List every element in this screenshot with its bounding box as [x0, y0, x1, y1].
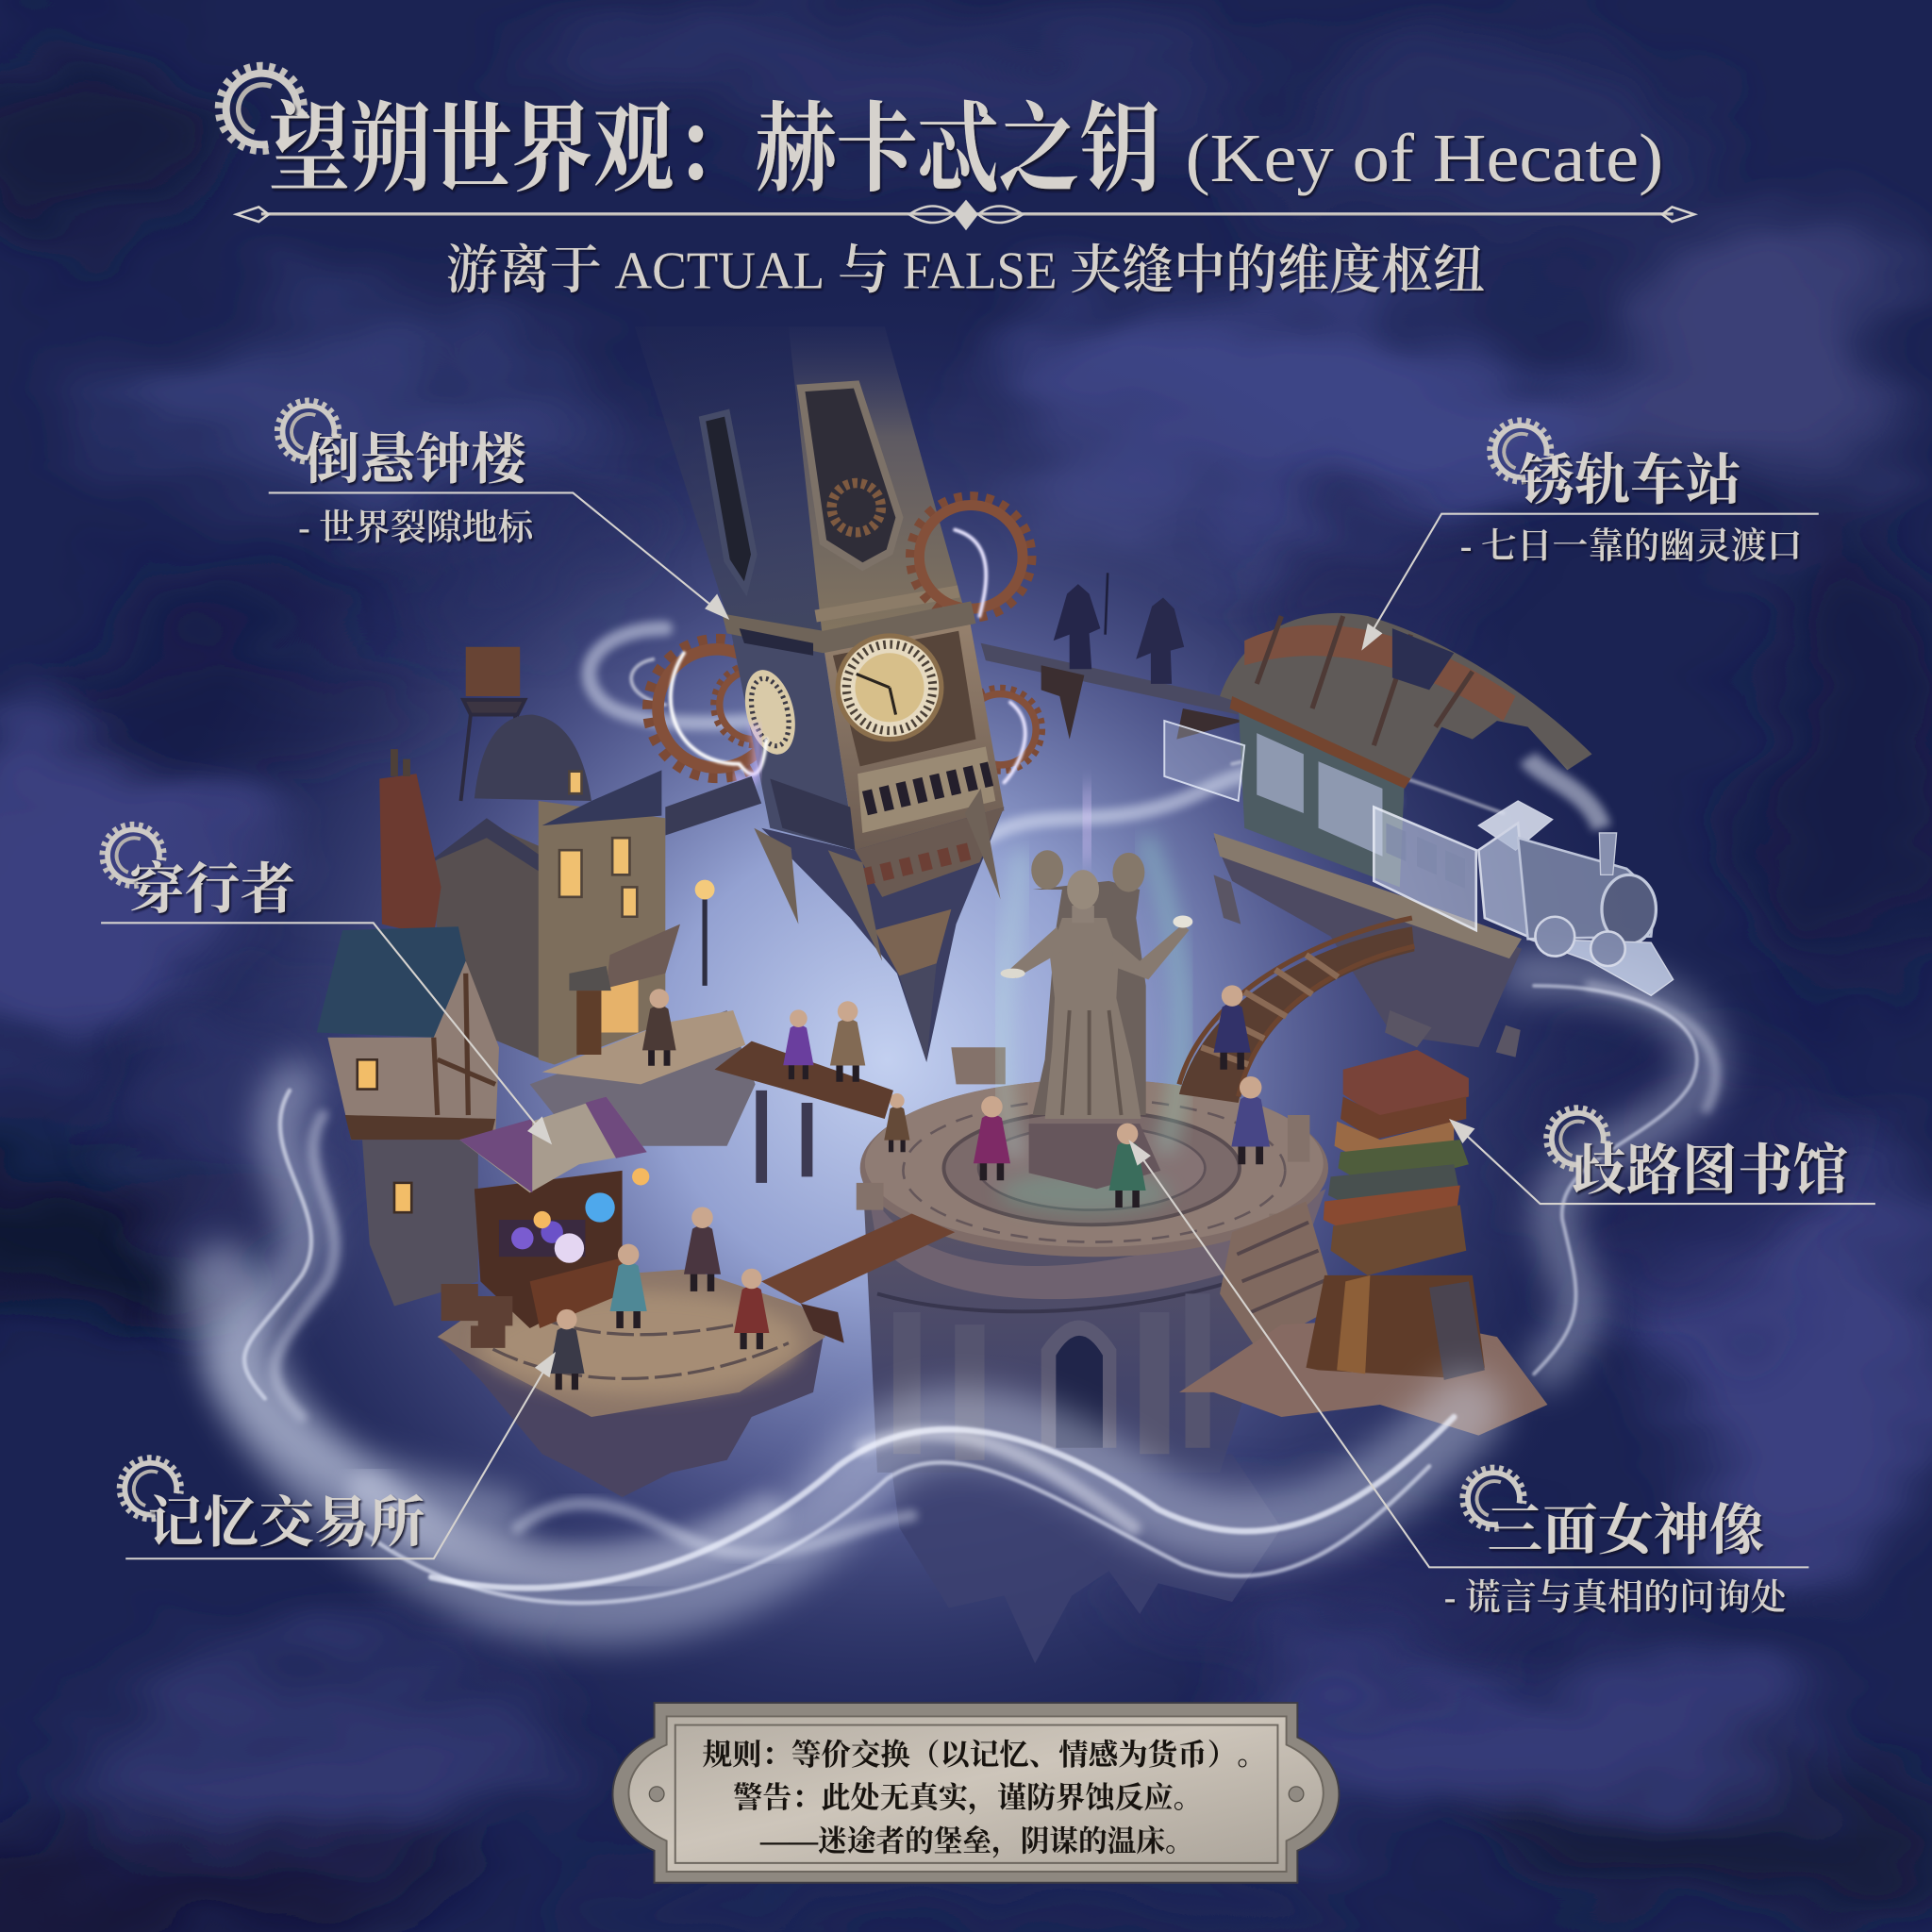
book stack — [1179, 1050, 1547, 1436]
upper ledge — [530, 1010, 756, 1146]
broken beam — [665, 776, 761, 836]
round plaza — [857, 1047, 1328, 1257]
callout: 歧路图书馆: 歧路图书馆 — [1571, 1140, 1848, 1201]
callout: 三面女神像 — [1128, 1140, 1808, 1618]
tower shaft — [635, 326, 966, 643]
left bridges — [715, 1041, 955, 1343]
mist: foreground swirls — [222, 1281, 1466, 1607]
sky bridge with guards — [981, 573, 1244, 740]
title latin: (Key of Hecate) — [1185, 120, 1663, 196]
plaque text: 规则：等价交换（以记忆、情感为货币）。 — [702, 1738, 1267, 1771]
floating clock tower — [635, 326, 1041, 1062]
barrels — [441, 1284, 512, 1348]
mist: back swirls — [236, 628, 1716, 1516]
callout: 穿行者: 穿行者 — [129, 859, 295, 921]
lightning — [671, 530, 1025, 784]
central temple platform — [857, 1047, 1337, 1663]
main title: 望朔世界观：赫卡忒之钥 — [269, 95, 1160, 204]
clock block — [722, 601, 1004, 850]
three-faced goddess statue — [1001, 850, 1192, 1189]
callout: 锈轨车站: 锈轨车站 — [1519, 450, 1741, 511]
spire — [754, 789, 1004, 1062]
ghost train — [1164, 721, 1674, 995]
callout: 倒悬钟楼 — [269, 402, 729, 620]
left island — [317, 647, 955, 1497]
rules plaque: 警告：此处无真实，谨防界蚀反应。 — [733, 1781, 1203, 1815]
lamp post — [695, 880, 715, 986]
stone steps — [1220, 1201, 1337, 1349]
divider ornament — [237, 200, 1694, 230]
plaque frame — [612, 1703, 1339, 1883]
title gear — [221, 68, 302, 149]
callout: 三面女神像: 三面女神像 — [1487, 1500, 1764, 1561]
callout: 三面女神像: - 谎言与真相的问询处 — [1444, 1578, 1788, 1618]
aura around statue — [1002, 789, 1182, 1158]
callout: 倒悬钟楼: - 世界裂隙地标 — [298, 508, 535, 548]
water tower — [460, 647, 525, 801]
villagers — [549, 989, 865, 1390]
main clock face — [836, 633, 943, 741]
side clock — [737, 665, 803, 759]
callout: 穿行者 — [101, 825, 552, 1144]
callout: 锈轨车站 — [1361, 422, 1819, 651]
rock base — [438, 1324, 825, 1497]
callout: 歧路图书馆 — [1449, 1108, 1875, 1204]
guard left — [1054, 584, 1100, 669]
rivets — [649, 1787, 1304, 1802]
callout: 记忆交易所: 记忆交易所 — [148, 1492, 425, 1554]
callout: 记忆交易所 — [121, 1352, 556, 1558]
timbered house — [317, 926, 499, 1306]
callout: 倒悬钟楼: 倒悬钟楼 — [305, 429, 530, 491]
rules plaque — [612, 1703, 1339, 1883]
floating debris — [1214, 874, 1521, 1058]
temple base — [862, 1171, 1328, 1663]
curved wooden stairs — [1179, 918, 1414, 1103]
callout: 锈轨车站: - 七日一靠的幽灵渡口 — [1460, 527, 1803, 567]
rust rail station — [1214, 613, 1592, 1047]
rules plaque: ——迷途者的堡垒，阴谋的温床。 — [759, 1824, 1194, 1858]
gears — [649, 497, 1041, 776]
figures on the temple plaza — [884, 985, 1270, 1208]
big house — [379, 715, 680, 1064]
plaza cobbles — [438, 1269, 825, 1417]
market stall — [459, 1096, 649, 1328]
guard right — [1136, 597, 1184, 684]
subtitle: 游离于 ACTUAL 与 FALSE 夹缝中的维度枢纽 — [446, 242, 1485, 301]
title block — [221, 68, 1694, 301]
